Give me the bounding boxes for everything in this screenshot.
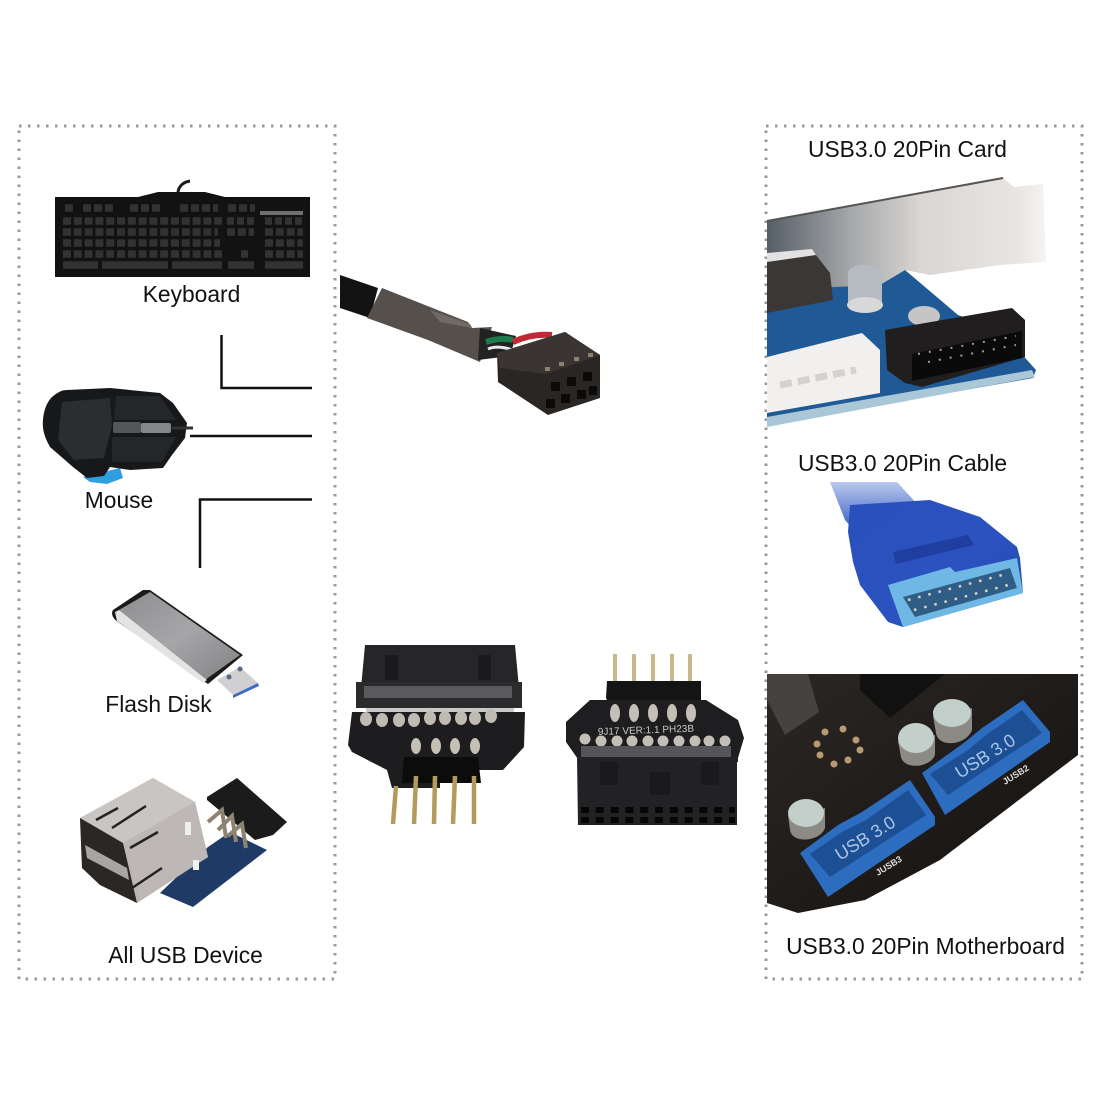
photo: USB3.0 20-pin motherboard: JUSB2 [1001,763,1031,787]
photo: USB3.0 20-pin motherboard: USB 3.0 [952,730,1019,782]
photo: USB3.0 20-pin motherboard: JUSB3 [874,854,904,878]
label: mouse: Mouse [85,487,153,513]
photo: USB3.0 20-pin cable [830,482,1023,627]
connector line: keyboard [222,335,312,388]
photo: adapter, socket side: 9J17 VER:1.1 PH23B [598,724,695,738]
label: USB3.0 card: USB3.0 20Pin Card [808,136,1007,162]
connector line: mouse [190,435,312,437]
label: keyboard: Keyboard [143,281,240,307]
label: USB3.0 motherboard: USB3.0 20Pin Motherboard [786,933,1065,959]
icon: flash disk [112,590,259,698]
panel: right connector frame [766,126,1082,979]
label: USB3.0 cable: USB3.0 20Pin Cable [798,450,1007,476]
icon: USB hub device [80,778,287,907]
label: flash disk: Flash Disk [105,691,212,717]
connector line: flash disk [200,500,312,568]
photo: adapter, pin side [348,645,525,824]
photo: adapter, socket side [566,654,744,825]
icon: keyboard [55,181,310,277]
icon: mouse [43,388,193,484]
photo: USB3.0 20-pin motherboard [767,674,1078,913]
photo: USB3.0 20-pin card [767,178,1046,427]
photo: 9-pin cable and connector [340,275,600,415]
label: all USB device: All USB Device [108,942,263,968]
photo: USB3.0 20-pin motherboard: USB 3.0 [832,812,899,864]
panel: left device frame [19,126,335,979]
